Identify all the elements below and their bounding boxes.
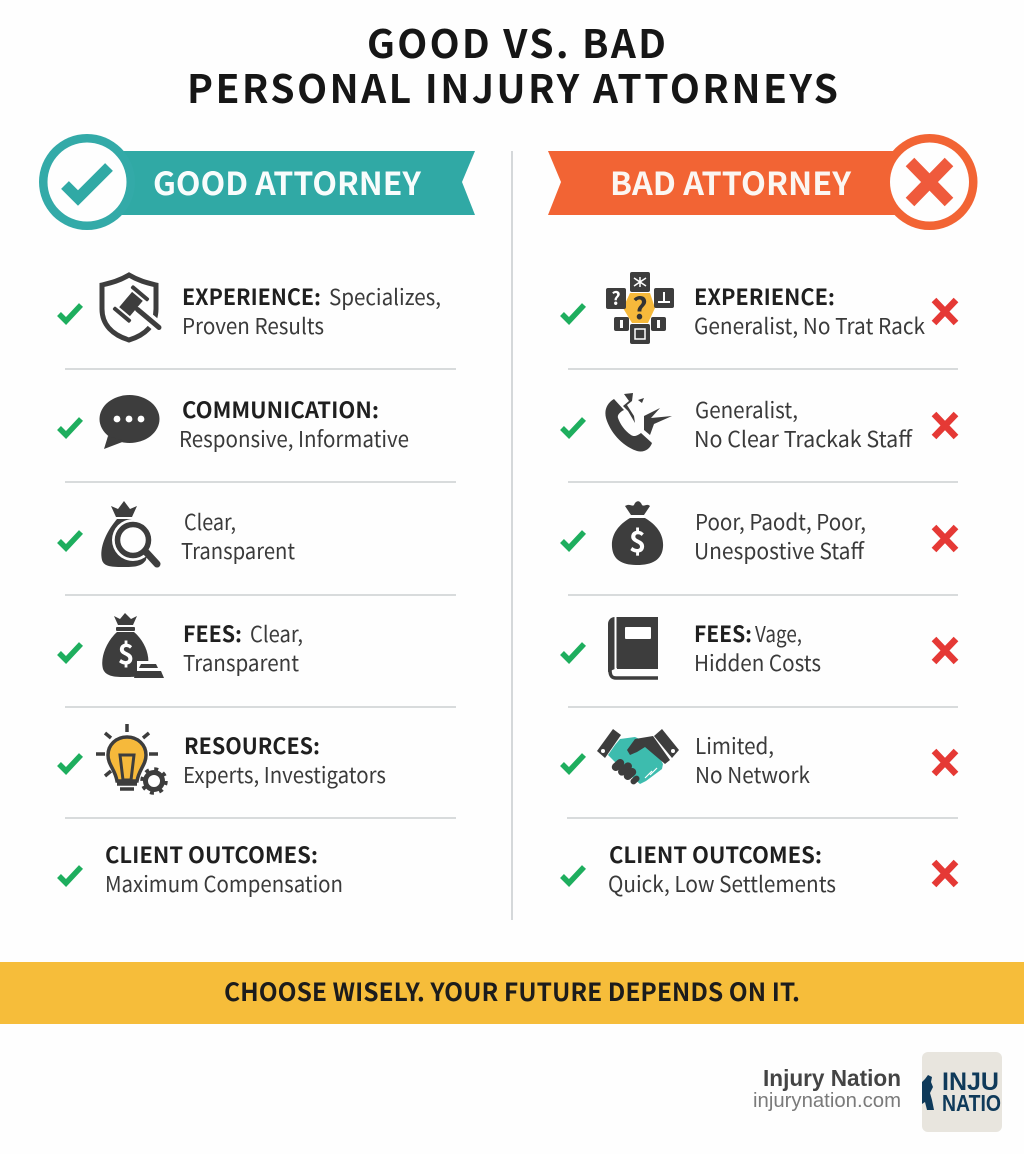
icon: money bag: $: [629, 519, 646, 561]
text: experience: Proven Results: [182, 309, 324, 341]
text: clear transparent: Clear,: [184, 505, 236, 537]
icon: red cross: [934, 639, 956, 662]
icon: teal check mark: [65, 167, 109, 198]
text: experience: EXPERIENCE:: [694, 280, 835, 312]
text: experience: EXPERIENCE:: [182, 280, 321, 312]
text: hidden costs: Vage,: [755, 617, 802, 649]
text: resources: RESOURCES:: [184, 729, 320, 761]
bad row: book: [562, 617, 956, 678]
text: communication: Generalist,: [695, 393, 798, 425]
title: [187, 14, 838, 115]
icon: broken phone with arrow: [605, 393, 672, 452]
icon: red cross: [934, 414, 956, 437]
panel: good attorney rows: [59, 275, 456, 899]
logo: [922, 1052, 1002, 1132]
text: hidden costs: FEES:: [694, 617, 752, 649]
footer brand text: [753, 1065, 901, 1112]
text: client outcomes: [105, 838, 343, 899]
icon: question mark cluster: ?: [611, 285, 621, 311]
text: communication: Responsive, Informative: [179, 422, 409, 454]
text: experience: [182, 280, 441, 341]
text: client outcomes: CLIENT OUTCOMES:: [609, 838, 822, 870]
icon: shield with gavel: [102, 275, 171, 341]
text: fees: Clear,: [250, 617, 303, 649]
good row: client outcomes: [59, 838, 343, 899]
callout band: [0, 962, 1024, 1024]
callout band: CHOOSE WISELY. YOUR FUTURE DEPENDS ON IT.: [224, 973, 800, 1009]
banner: bad attorney: [548, 134, 978, 230]
good row: clear transparent: [59, 501, 295, 567]
icon: light bulb with gear: [96, 724, 166, 793]
icon: handshake: [597, 729, 679, 786]
text: hidden costs: Hidden Costs: [694, 646, 821, 678]
text: resources: [183, 729, 386, 790]
text: fees: FEES:: [183, 617, 242, 649]
footer brand text: Injury Nation: [763, 1065, 901, 1091]
text: experience: Generalist, No Trat Rack: [694, 309, 925, 341]
good row: experience: [59, 275, 441, 341]
icon: red cross: [934, 527, 956, 550]
icon: money bag with magnifier: [101, 501, 165, 567]
text: client outcomes: CLIENT OUTCOMES:: [105, 838, 318, 870]
text: hidden costs: [694, 617, 821, 678]
icon: red cross: [934, 862, 956, 885]
good row: fees: [59, 613, 303, 681]
banner: good attorney: [39, 134, 475, 230]
title: GOOD VS. BAD: [367, 14, 666, 70]
bad row: network: [562, 729, 956, 790]
text: client outcomes: Quick, Low Settlements: [608, 867, 836, 899]
bad row: experience: [562, 272, 956, 344]
text: network: No Network: [695, 758, 810, 790]
bad row: client outcomes: [562, 838, 956, 899]
text: experience: [694, 280, 925, 341]
logo: INJU: [942, 1068, 999, 1096]
text: fees: Unespostive Staff: [694, 534, 865, 566]
text: network: Limited,: [695, 729, 774, 761]
icon: red cross: [934, 751, 956, 774]
banner label: good attorney: GOOD ATTORNEY: [153, 159, 421, 205]
icon: money bag with gold bars: $: [118, 633, 134, 673]
text: client outcomes: [608, 838, 836, 899]
text: communication: No Clear Trackak Staff: [694, 422, 913, 454]
bad row: communication: [562, 393, 956, 454]
text: communication: [179, 393, 409, 454]
icon: red cross: [934, 300, 956, 323]
icon: book: [608, 617, 658, 678]
icon: question mark cluster: ?: [632, 284, 648, 328]
text: clear transparent: [181, 505, 295, 566]
text: fees: Transparent: [183, 646, 299, 678]
text: experience: Specializes,: [329, 280, 441, 312]
text: fees: [694, 505, 866, 566]
text: clear transparent: Transparent: [181, 534, 295, 566]
text: client outcomes: Maximum Compensation: [105, 867, 343, 899]
icon: money bag with gold bars: [102, 613, 164, 681]
good row: communication: [59, 393, 409, 454]
title: PERSONAL INJURY ATTORNEYS: [187, 59, 838, 115]
footer brand text: injurynation.com: [753, 1090, 901, 1112]
panel: bad attorney rows: [562, 272, 958, 899]
icon: speech bubble: [100, 395, 160, 449]
text: network: [695, 729, 810, 790]
good row: resources: [59, 724, 386, 793]
bad row: fees: [562, 501, 956, 566]
icon: money bag: [612, 501, 663, 565]
banner label: bad attorney: BAD ATTORNEY: [610, 159, 851, 205]
text: resources: Experts, Investigators: [183, 758, 386, 790]
icon: red cross: [910, 162, 949, 202]
icon: question mark cluster: [606, 272, 674, 344]
text: fees: [183, 617, 303, 678]
text: communication: COMMUNICATION:: [182, 393, 379, 425]
text: communication: [694, 393, 913, 454]
text: fees: Poor, Paodt, Poor,: [695, 505, 866, 537]
